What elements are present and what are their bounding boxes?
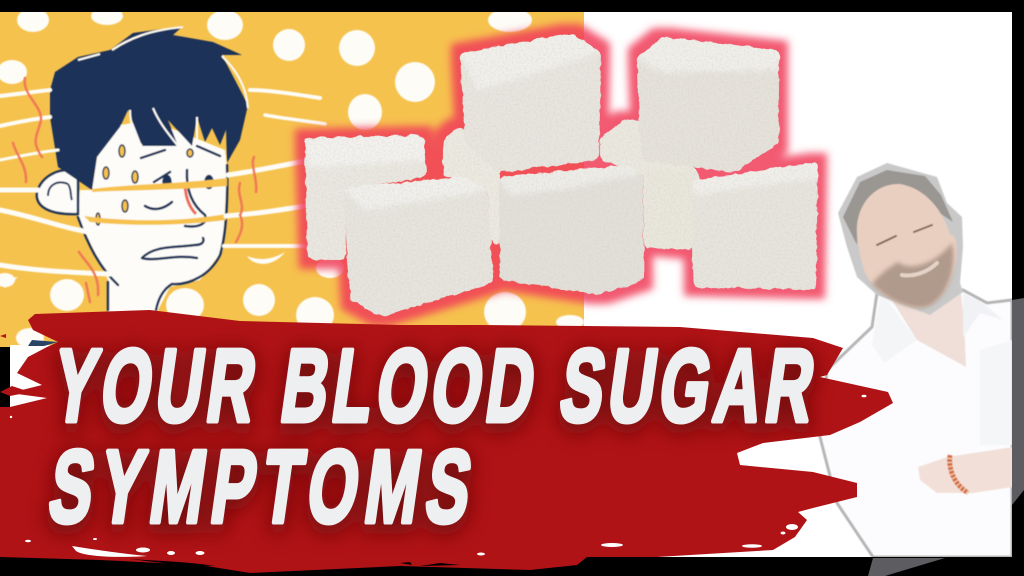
cube: top right <box>637 37 779 173</box>
right shirt shading <box>1010 340 1012 446</box>
shirt <box>820 290 1012 557</box>
sweat drops <box>96 145 193 225</box>
presenter photo cut-out <box>820 163 1013 557</box>
cube glow <box>304 33 818 317</box>
title line 2: SYMPTOMS <box>43 430 486 545</box>
title <box>43 329 826 545</box>
right collar <box>963 293 1003 337</box>
lips <box>902 263 937 275</box>
bracelet <box>950 455 968 493</box>
head halo outline <box>838 163 963 315</box>
white paint flecks <box>10 395 867 557</box>
left collar <box>872 297 917 363</box>
left torn edge details <box>0 334 58 407</box>
hair <box>843 170 953 245</box>
neck <box>893 294 966 367</box>
yellow polka dot illustration background <box>0 7 584 348</box>
text shadow area <box>43 334 826 550</box>
face <box>857 184 957 308</box>
sugar cubes with red glow <box>304 33 818 317</box>
red brush banner <box>0 310 893 573</box>
cube: far left <box>304 135 427 260</box>
red nose shadow <box>185 186 196 214</box>
presenter overflow shaded by the frame <box>868 298 1024 576</box>
face outline and features <box>78 146 227 310</box>
white wind lines <box>0 90 325 274</box>
ear <box>37 170 78 214</box>
cube: front middle <box>499 165 644 295</box>
cube: front left <box>343 177 493 317</box>
cube: top middle <box>460 33 601 173</box>
neck and face <box>78 120 227 312</box>
black paint flecks <box>130 559 460 566</box>
back cubes <box>443 120 700 250</box>
orange heat squiggles <box>13 78 256 302</box>
white petal <box>0 252 285 288</box>
beard <box>872 243 953 308</box>
cube: right <box>692 162 818 290</box>
hair <box>50 26 248 190</box>
yellow wind bands across face <box>84 178 227 225</box>
text shadow area: SYMPTOMS <box>43 435 486 550</box>
icon: dizzy sweating boy illustration <box>0 26 325 312</box>
eyes <box>877 225 932 245</box>
forearm <box>918 447 1013 493</box>
title line 1: YOUR BLOOD SUGAR <box>47 329 826 444</box>
text shadow area: YOUR BLOOD SUGAR <box>47 334 826 449</box>
hair highlights <box>78 27 248 146</box>
